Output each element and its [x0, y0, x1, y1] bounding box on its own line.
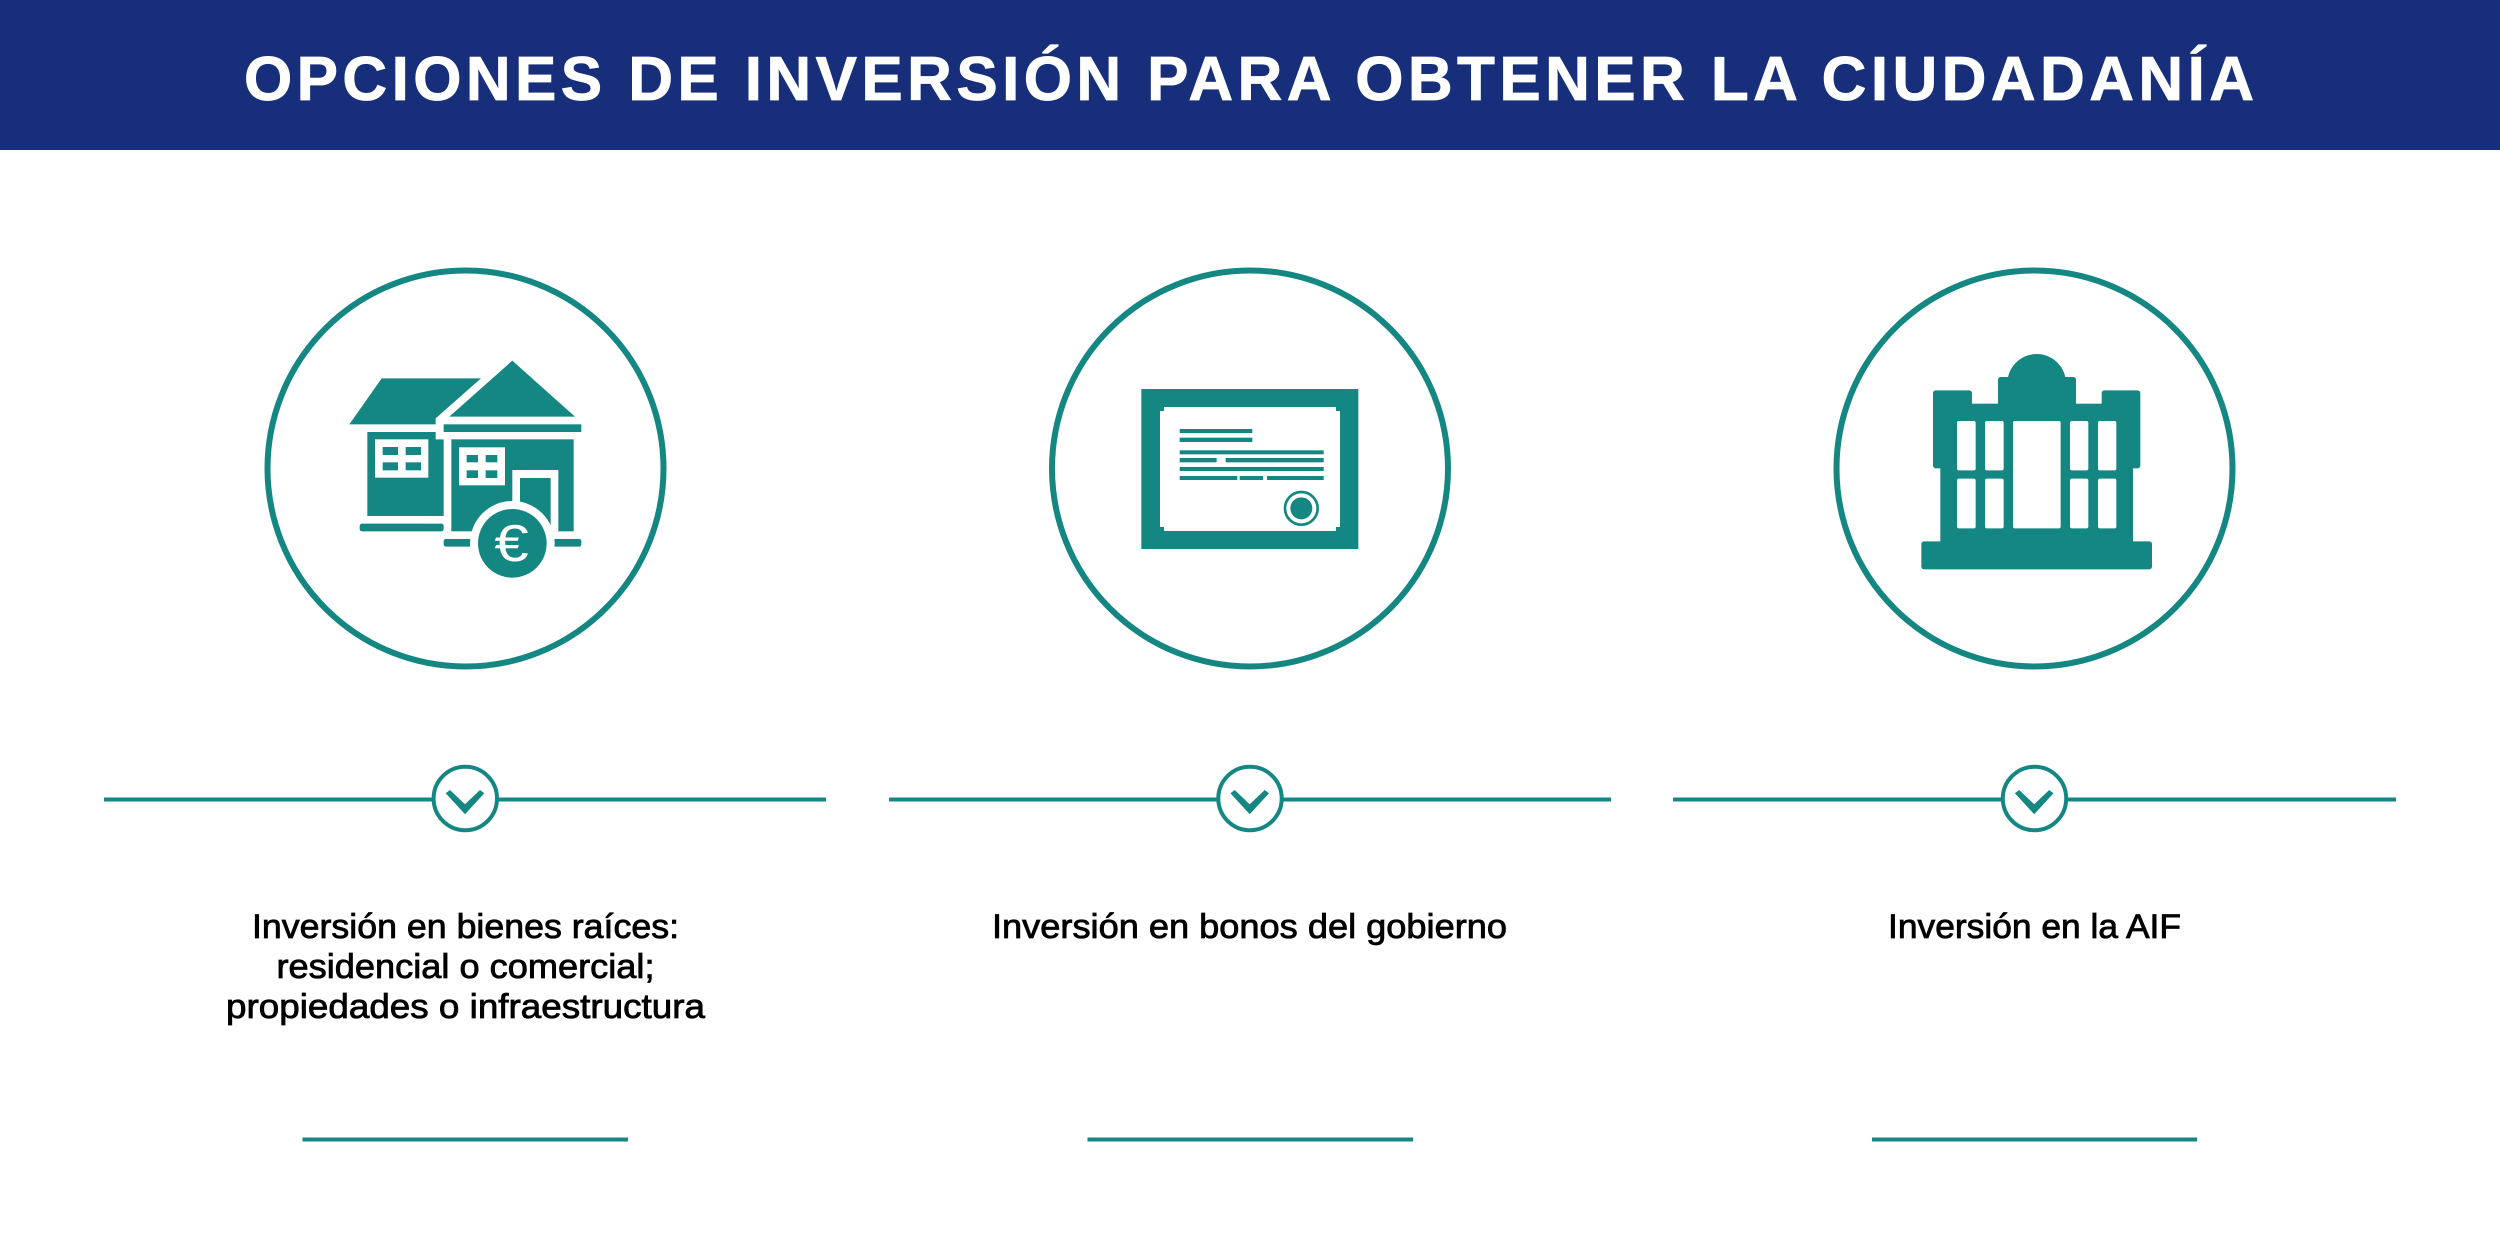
icon: certificate in circle [1052, 270, 1448, 666]
bottom rule [1088, 1138, 1413, 1142]
panel: government bonds [889, 270, 1611, 1140]
text: government bonds: Inversión en bonos del gobierno [992, 908, 1507, 946]
text: real estate: Inversión en bienes raíces: [252, 908, 679, 946]
title banner [0, 0, 2500, 150]
title: OPCIONES DE INVERSIÓN PARA OBTENER LA CIUDADANÍA [244, 45, 2254, 114]
divider with chevron [1673, 767, 2396, 830]
icon: house with euro coin in circle [268, 270, 664, 666]
bottom rule [302, 1138, 628, 1142]
divider with chevron [889, 767, 1611, 830]
icon: house with euro coin in circle: € [494, 514, 529, 572]
divider with chevron [104, 767, 826, 830]
text: real estate [226, 908, 705, 1026]
panel: AIF investment [1673, 270, 2396, 1140]
bottom rule [1872, 1138, 2197, 1142]
icon: institutional building in circle [1836, 270, 2232, 666]
panel: real estate investment [104, 270, 826, 1140]
text: real estate: residencial o comercial; [276, 948, 654, 986]
text: real estate: propiedades o infraestructura [226, 988, 705, 1026]
text: AIF: Inversión en la AIF [1888, 908, 2181, 946]
